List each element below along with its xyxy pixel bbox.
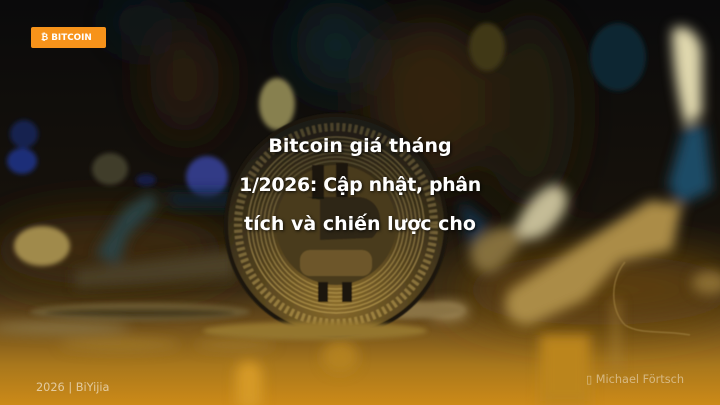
category tag [31,27,106,48]
golden table surface [0,300,620,405]
thin ring reflections [614,262,690,335]
foreground coin edge [203,322,427,340]
year and source: 2026 | BiYijia [36,381,109,394]
bitcoin symbol on coin [306,163,380,302]
blurred streaks [75,27,720,325]
coin stack in foreground [30,301,465,321]
title: Bitcoin giá tháng [268,135,452,157]
title [239,135,481,237]
photo credit: ▯ Michael Förtsch [586,373,684,386]
title: tích và chiến lược cho [244,213,476,235]
title: 1/2026: Cập nhật, phân [239,174,481,196]
bokeh lights [7,23,646,266]
category tag: ₿ BITCOIN [41,33,92,43]
bitcoin coin [224,113,448,337]
